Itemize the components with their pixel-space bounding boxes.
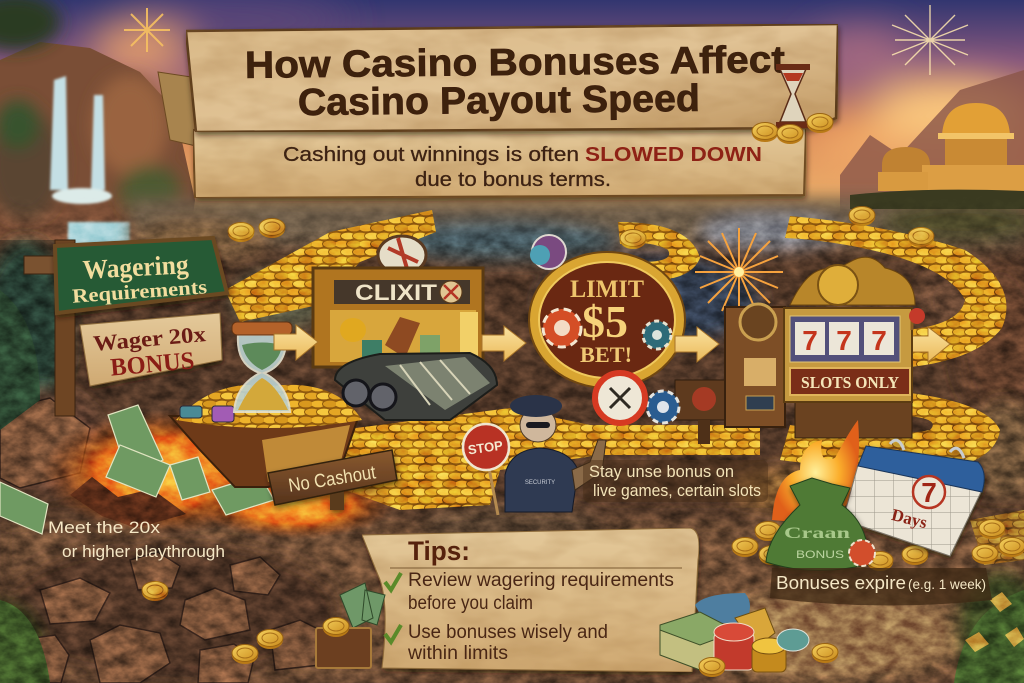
chip by bag (849, 540, 875, 566)
reels: 7 (802, 325, 818, 356)
striped plate (378, 236, 426, 274)
firework behind slot machine (695, 228, 783, 316)
slots only label: SLOTS ONLY (801, 373, 899, 392)
wager 20x bonus parchment: BONUS (109, 347, 195, 382)
caption: live games: live games, certain slots (593, 481, 761, 500)
caption: bonuses expire: (e.g. 1 week) (908, 576, 986, 592)
calendar (843, 440, 984, 556)
no cashout sign (268, 450, 397, 510)
palace buildings (850, 103, 1024, 209)
fireworks top left (124, 8, 170, 52)
subtitle banner: due to bonus terms. (415, 169, 611, 191)
teal chip (643, 321, 671, 349)
subtitle banner: SLOWED DOWN (585, 144, 762, 166)
fireworks top right (892, 5, 968, 75)
sunset glow and clouds (90, 0, 1024, 175)
check 2 (385, 625, 401, 642)
banner hourglass with coins (752, 64, 833, 144)
arm (572, 440, 606, 490)
caption: playthrough: or higher playthrough (62, 542, 225, 561)
main body (784, 308, 912, 402)
sky (0, 0, 1024, 215)
caption: bonuses expire (770, 568, 992, 606)
calendar: Days (890, 505, 929, 532)
lever (909, 308, 925, 330)
coin heap (176, 385, 362, 428)
middle ground river and earth (0, 198, 1024, 514)
tip 2: Use bonuses wisely and (408, 622, 608, 643)
top chip (530, 235, 566, 269)
tip 1: before you claim (408, 593, 533, 614)
caption: live games (583, 460, 768, 502)
caption: bonuses expire: Bonuses expire (776, 573, 906, 593)
check 1 (385, 573, 401, 590)
green sign (55, 238, 227, 313)
arrows (274, 325, 950, 362)
bet limit machine (313, 236, 497, 420)
calendar: 7 (921, 477, 937, 508)
coin roads (225, 210, 1024, 565)
loot (340, 318, 366, 342)
main dome (942, 103, 1010, 135)
title line 2: Casino Payout Speed (298, 78, 700, 124)
side cabinet (725, 307, 785, 427)
tip 2 (407, 622, 608, 664)
tip 1: Review wagering requirements (408, 570, 674, 591)
flames (772, 420, 859, 525)
no sign and small sign (595, 373, 735, 444)
title banner (186, 24, 838, 132)
subtitle banner (193, 128, 806, 198)
body (505, 448, 578, 512)
conveyor (335, 353, 497, 420)
distant mountains (840, 70, 1024, 215)
bonus money bag: Craan (784, 525, 850, 542)
tip 2: within limits (407, 643, 508, 664)
tips heading: Tips: (408, 536, 470, 566)
caption: live games: Stay unse bonus on (589, 462, 734, 481)
reels: 7 (836, 325, 852, 356)
signpost: wagering requirements (24, 238, 227, 416)
red chip (543, 309, 581, 347)
side tower (882, 147, 930, 190)
title line 1: How Casino Bonuses Affect (245, 39, 785, 87)
foliage (0, 290, 1024, 683)
foreground rocks (0, 398, 330, 683)
machine frame (313, 268, 483, 367)
security mascot with stop sign (463, 395, 606, 515)
reels (795, 322, 894, 356)
left cliff (0, 42, 195, 240)
green sign: Requirements (71, 276, 208, 308)
stack of cash and chips (660, 593, 838, 677)
blue chip (647, 391, 679, 423)
post (55, 240, 75, 416)
cash notes (0, 405, 286, 534)
stop sign: STOP (467, 438, 504, 457)
x badge (440, 281, 462, 303)
caption: playthrough: Meet the 20x (48, 518, 161, 537)
chest body (170, 416, 358, 487)
bonus money bag (766, 478, 868, 571)
left ribbon of title banner (158, 72, 198, 146)
bet limit machine: CLIXIT (355, 280, 438, 305)
limit $5 bet badge: LIMIT (570, 276, 644, 303)
head (520, 408, 556, 442)
top ornament (790, 257, 915, 305)
reels: 7 (871, 325, 887, 356)
limit $5 bet badge: $5 (582, 296, 628, 347)
base (795, 400, 912, 438)
limit $5 bet badge: BET! (580, 342, 632, 367)
coins around bag (732, 520, 1024, 571)
hourglass (232, 322, 292, 412)
wooden sign (675, 380, 735, 444)
waterfall (50, 76, 130, 246)
security mascot with stop sign: SECURITY (525, 480, 555, 486)
stop sign (463, 424, 509, 515)
slot machine (725, 257, 925, 438)
treasure chest with coins and cash (0, 385, 362, 534)
small chest with cash (232, 583, 385, 668)
subtitle text: Cashing out winnings is often (283, 144, 579, 166)
bonus money bag: BONUS (796, 549, 844, 561)
green sign: Wagering (82, 249, 190, 285)
caption: playthrough (48, 518, 225, 561)
tip 1 (408, 570, 674, 614)
x circle (595, 373, 645, 423)
gems (180, 406, 234, 422)
main hall (922, 165, 1024, 192)
slots only label (790, 368, 910, 395)
crossbar (24, 256, 64, 274)
tips scroll (362, 528, 699, 672)
no cashout sign: No Cashout (287, 462, 378, 497)
lava pit (40, 410, 395, 539)
fallen coins (142, 206, 934, 601)
rocky foreground (0, 390, 1024, 683)
wager 20x bonus parchment: Wager 20x (92, 321, 207, 356)
wager 20x bonus parchment (80, 313, 222, 386)
limit $5 bet badge (529, 235, 685, 388)
